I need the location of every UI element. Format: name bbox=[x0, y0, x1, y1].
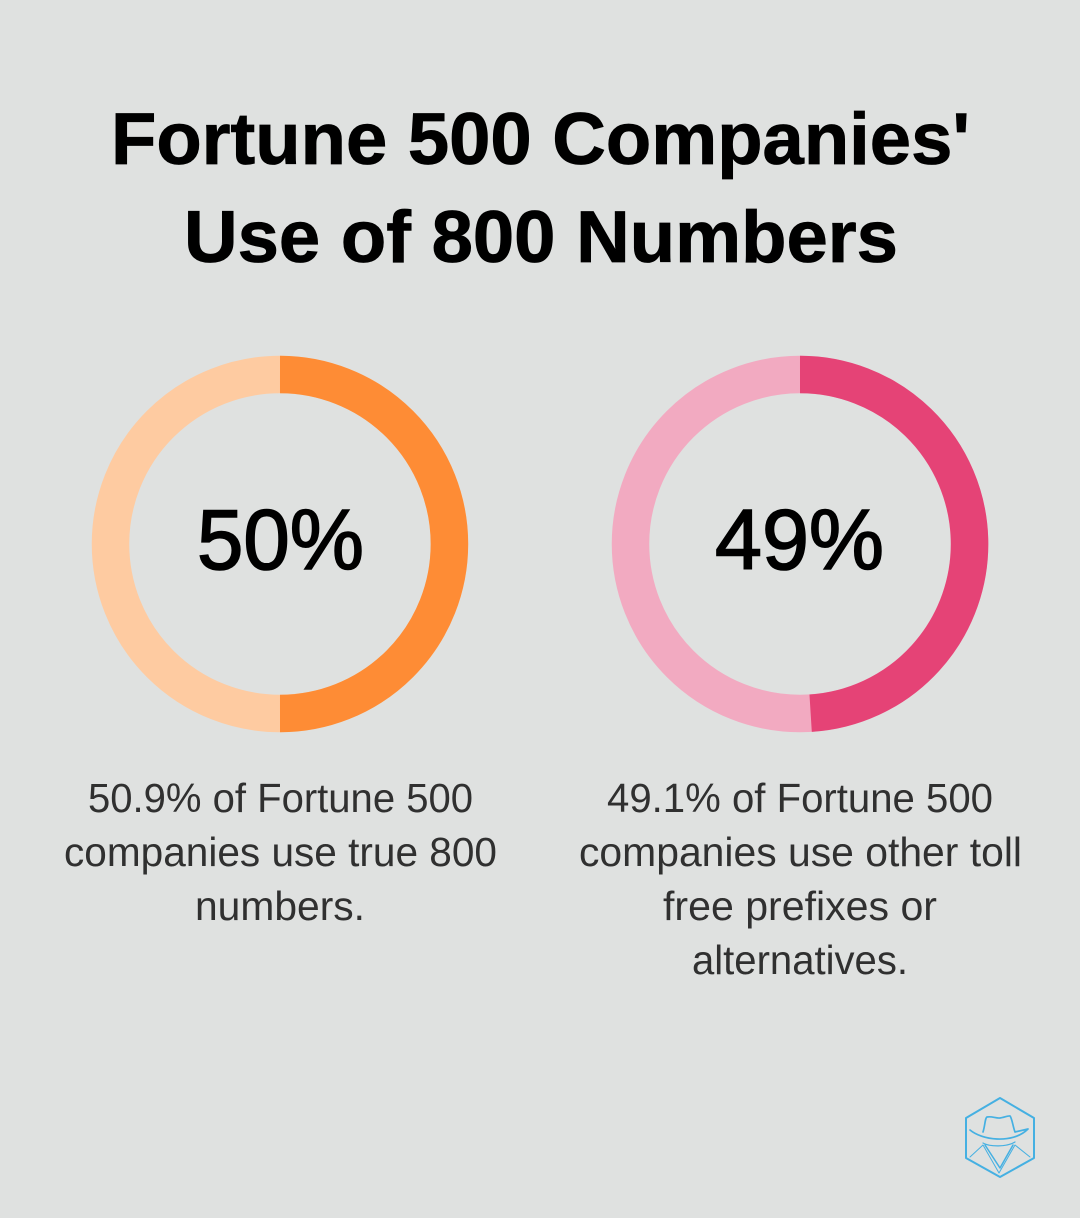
title: Fortune 500 Companies' bbox=[111, 99, 970, 180]
donut value: 50%: 50% bbox=[197, 493, 364, 588]
description: 50.9%: companies use true 800 bbox=[64, 829, 497, 875]
title bbox=[111, 99, 970, 278]
description: 49.1%: companies use other toll bbox=[579, 829, 1022, 875]
description: 49.1%: free prefixes or bbox=[663, 883, 937, 929]
donut chart: 49% bbox=[630, 374, 970, 714]
icon: spy logo in hexagon bbox=[966, 1098, 1034, 1177]
description: 49.1%: 49.1% of Fortune 500 bbox=[607, 775, 993, 821]
donut value: 49%: 49% bbox=[715, 493, 884, 588]
description: 49.1% bbox=[579, 775, 1022, 983]
description: 50.9%: 50.9% of Fortune 500 bbox=[88, 775, 473, 821]
description: 50.9%: numbers. bbox=[195, 883, 365, 929]
description: 49.1%: alternatives. bbox=[692, 937, 908, 983]
panel: 49% other toll free prefixes bbox=[579, 374, 1022, 983]
description: 50.9% bbox=[64, 775, 497, 929]
donut chart: 50% bbox=[110, 374, 450, 714]
title: Use of 800 Numbers bbox=[184, 197, 898, 278]
panel: 50% true 800 numbers bbox=[64, 374, 497, 929]
